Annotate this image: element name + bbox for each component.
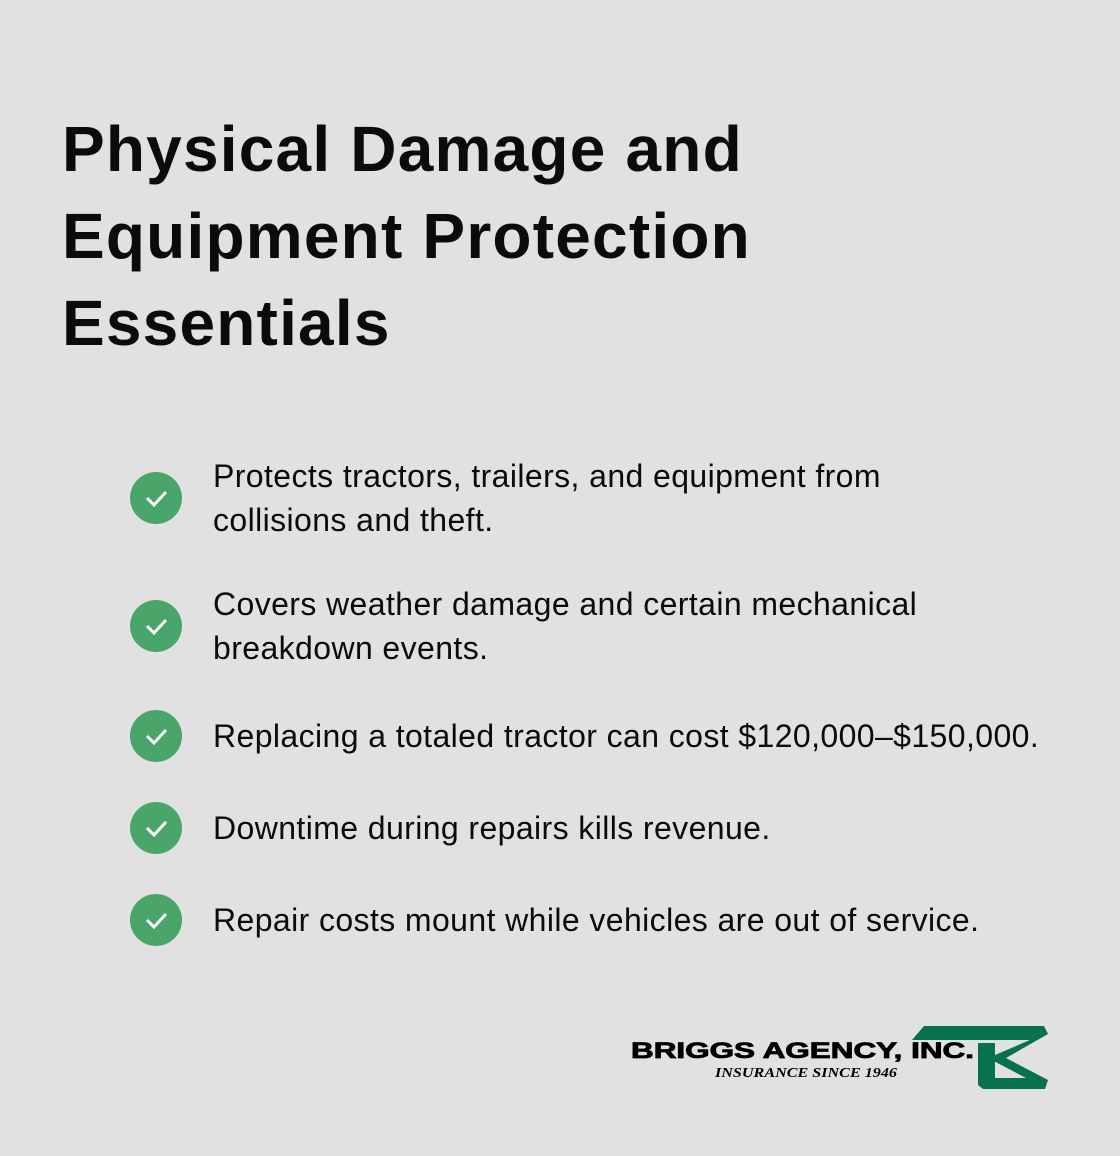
logo bbox=[631, 1026, 1048, 1089]
icon: check bbox=[130, 710, 182, 762]
item 5 bbox=[130, 894, 979, 946]
text: Downtime during repairs kills revenue. bbox=[213, 810, 771, 846]
title: Equipment Protection bbox=[62, 200, 751, 272]
title bbox=[62, 113, 751, 359]
text bbox=[213, 586, 917, 666]
text: Covers weather damage and certain mechanical bbox=[213, 586, 917, 622]
icon: check bbox=[130, 600, 182, 652]
text: breakdown events. bbox=[213, 630, 488, 666]
item 3 bbox=[130, 710, 1039, 762]
text: collisions and theft. bbox=[213, 502, 494, 538]
title: Essentials bbox=[62, 287, 391, 359]
logo name: BRIGGS AGENCY, INC. bbox=[631, 1038, 974, 1063]
title: Physical Damage and bbox=[62, 113, 743, 185]
logo tagline: INSURANCE SINCE 1946 bbox=[714, 1066, 897, 1081]
icon: check bbox=[130, 472, 182, 524]
icon: check bbox=[130, 894, 182, 946]
item 2 bbox=[130, 586, 917, 666]
text: Replacing a totaled tractor can cost $120,000–$150,000. bbox=[213, 718, 1039, 754]
icon: check bbox=[130, 802, 182, 854]
text: Repair costs mount while vehicles are out of service. bbox=[213, 902, 979, 938]
text bbox=[213, 458, 881, 538]
item 4 bbox=[130, 802, 771, 854]
logo mark bbox=[912, 1026, 1048, 1089]
text: Protects tractors, trailers, and equipment from bbox=[213, 458, 881, 494]
item 1 bbox=[130, 458, 881, 538]
